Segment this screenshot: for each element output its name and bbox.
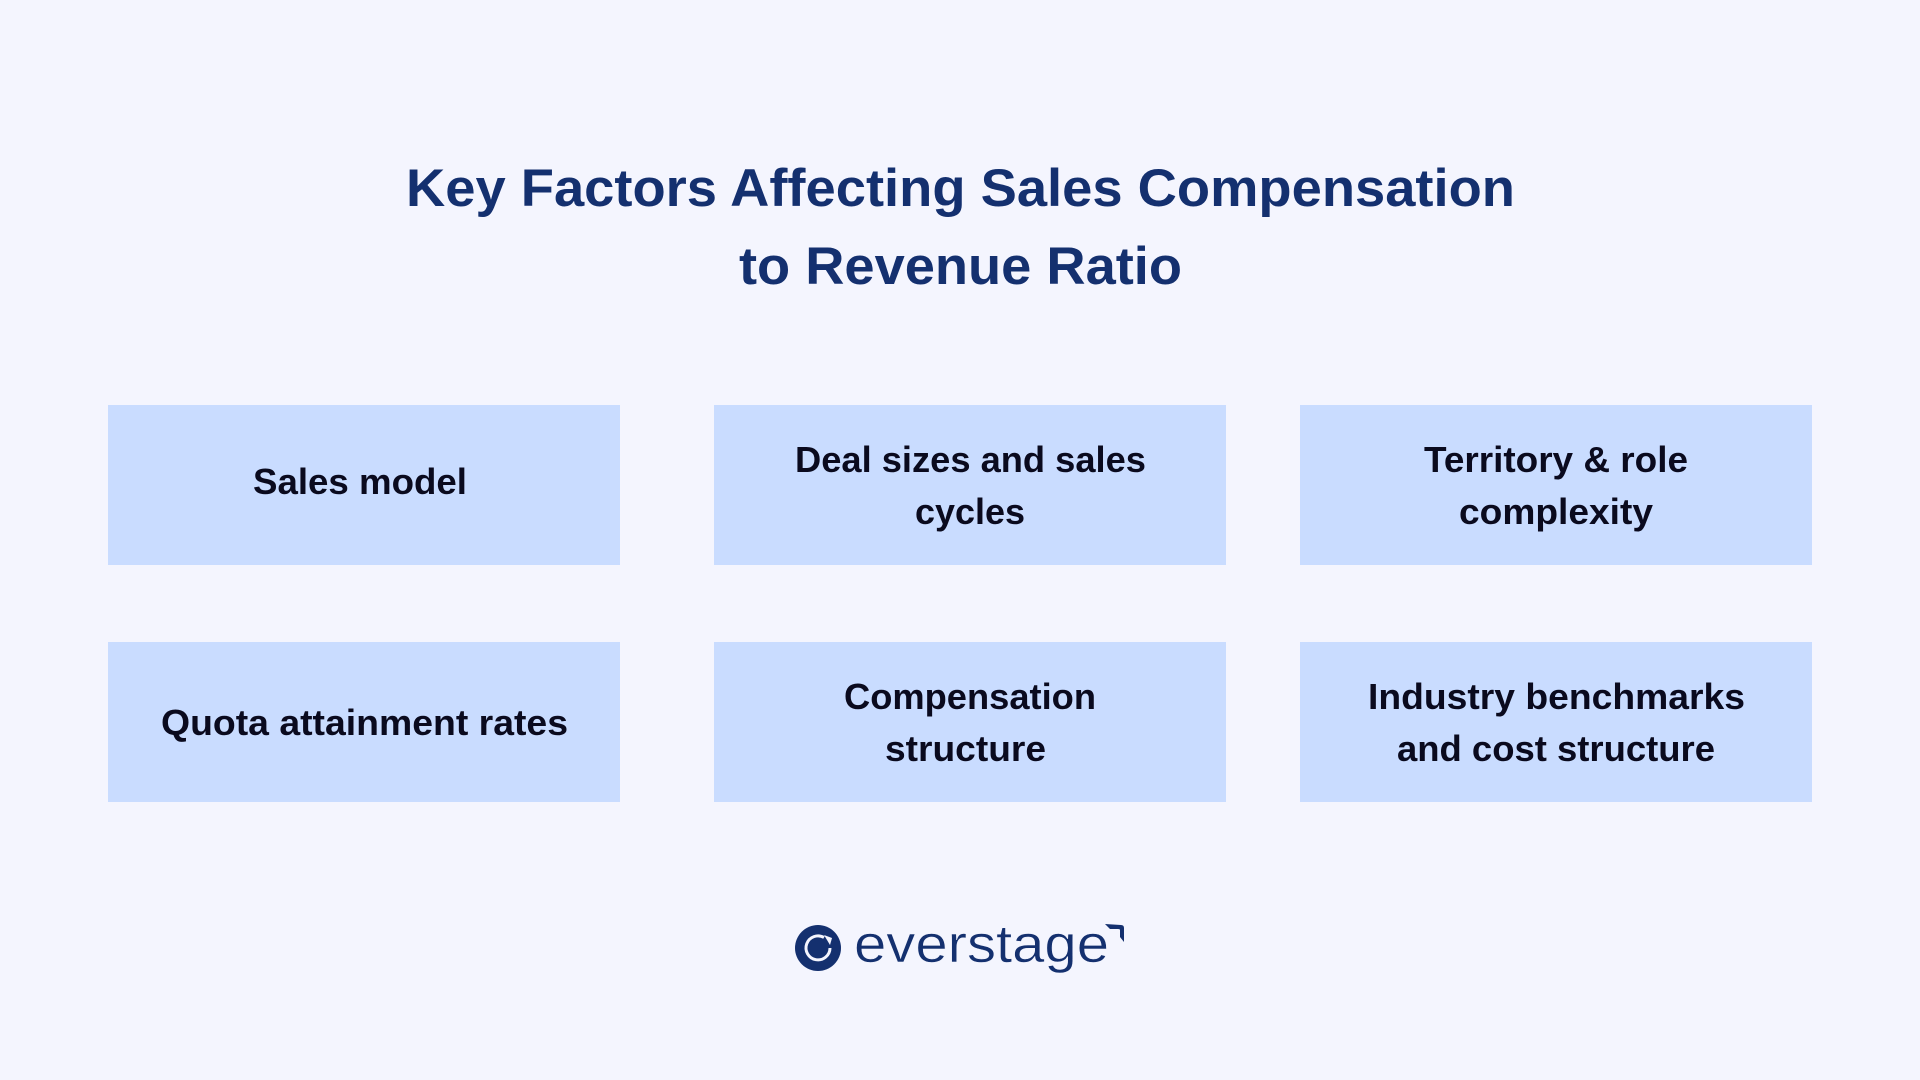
panel: industry benchmarks and cost structure bbox=[1300, 642, 1812, 802]
panel: industry benchmarks and cost structure: and cost structure bbox=[1397, 728, 1715, 769]
panel: deal sizes and sales cycles bbox=[714, 405, 1226, 565]
title: Key Factors Affecting Sales Compensation bbox=[406, 159, 1515, 218]
panel: quota attainment rates bbox=[108, 642, 620, 802]
wordmark: everstage bbox=[854, 915, 1109, 974]
panel: territory and role complexity: Territory & role bbox=[1424, 439, 1688, 480]
icon: everstage circle mark bbox=[795, 925, 841, 971]
panel: deal sizes and sales cycles: cycles bbox=[915, 491, 1025, 532]
title bbox=[406, 159, 1515, 296]
panel: compensation structure: Compensation bbox=[844, 676, 1096, 717]
logo: everstage bbox=[795, 915, 1124, 974]
panel: compensation structure bbox=[714, 642, 1226, 802]
panel: territory and role complexity bbox=[1300, 405, 1812, 565]
panel: quota attainment rates: Quota attainment rates bbox=[161, 702, 568, 743]
panel: industry benchmarks and cost structure: Industry benchmarks bbox=[1368, 676, 1745, 717]
icon: corner mark bbox=[1105, 924, 1124, 942]
panel: compensation structure: structure bbox=[885, 728, 1046, 769]
panel: territory and role complexity: complexity bbox=[1459, 491, 1653, 532]
panel: deal sizes and sales cycles: Deal sizes and sales bbox=[795, 439, 1146, 480]
panel: sales model bbox=[108, 405, 620, 565]
title: to Revenue Ratio bbox=[739, 237, 1182, 296]
panel: sales model: Sales model bbox=[253, 461, 467, 502]
